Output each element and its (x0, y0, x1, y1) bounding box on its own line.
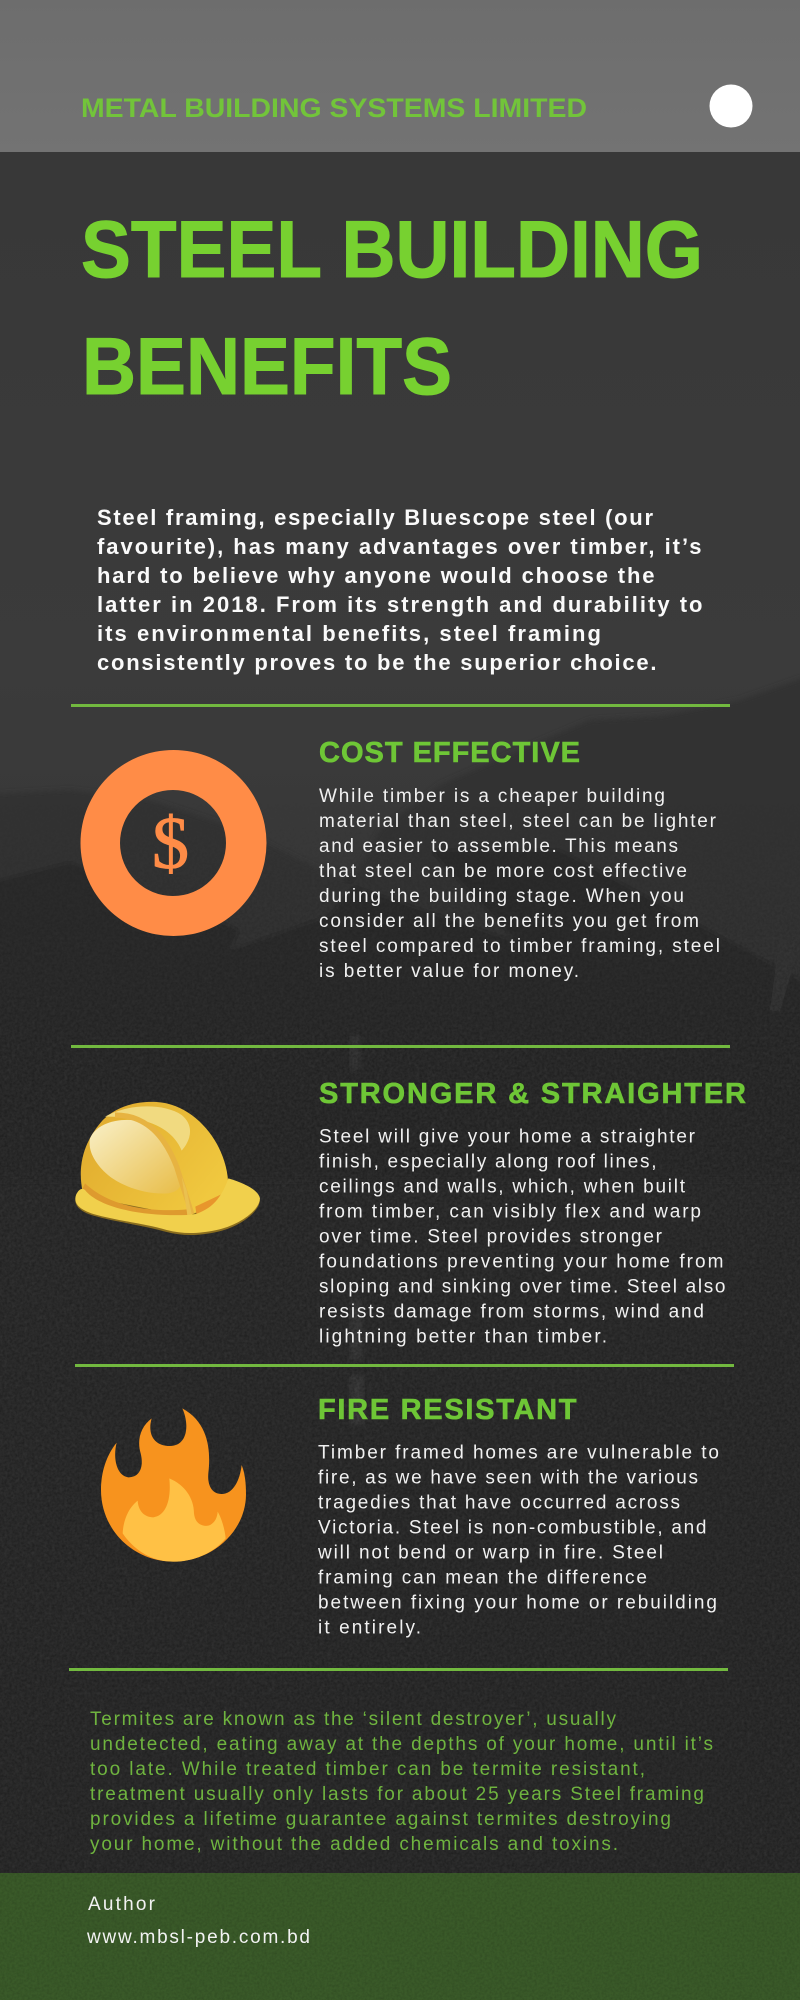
text block: stronger and straighter: lightning better than timber. (319, 1326, 607, 1348)
text block: cost effective: material than steel, steel can be lighter (319, 811, 717, 832)
panel: cost effective (80, 737, 720, 982)
text block: stronger and straighter: from timber, can visibly flex and warp (319, 1202, 701, 1222)
text block: stronger and straighter: Steel will give your home a straighter (319, 1126, 696, 1148)
panel: stronger and straighter (75, 1078, 746, 1348)
text block: cost effective: is better value for money. (319, 961, 579, 982)
intro paragraph: Steel framing, especially Bluescope steel (our (97, 505, 653, 530)
panel: fire resistant (101, 1394, 719, 1638)
intro paragraph: hard to believe why anyone would choose the (97, 563, 654, 588)
text block: fire resistant: fire, as we have seen with the various (318, 1468, 698, 1488)
text block: fire resistant: framing can mean the difference (318, 1568, 647, 1588)
intro paragraph: its environmental benefits, steel framing (97, 621, 601, 646)
text block: termites: Termites are known as the ‘silent destroyer’, usually (90, 1709, 616, 1730)
text block: cost effective: that steel can be more cost effective (319, 861, 687, 882)
title: STEEL BUILDING (81, 205, 703, 295)
text block: stronger and straighter: over time. Steel provides stronger (319, 1226, 663, 1248)
text block: fire resistant: tragedies that have occurred across (318, 1492, 680, 1514)
heading: stronger and straighter: STRONGER & STRAIGHTER (319, 1078, 746, 1110)
text block: cost effective: While timber is a cheaper building (319, 786, 665, 807)
text block: cost effective: steel compared to timber framing, steel (319, 936, 720, 957)
text block: stronger and straighter (319, 1126, 726, 1348)
text block: fire resistant: it entirely. (318, 1618, 421, 1638)
text block: fire resistant (317, 1442, 719, 1638)
website: www.mbsl-peb.com.bd (86, 1927, 310, 1948)
intro paragraph: consistently proves to be the superior choice. (97, 650, 656, 675)
text block: termites (90, 1709, 713, 1855)
text block: stronger and straighter: resists damage from storms, wind and (319, 1302, 704, 1322)
icon: orange ring with dollar sign: $ (152, 803, 189, 885)
text block: termites: treatment usually only lasts for about 25 years Steel framing (90, 1784, 704, 1805)
text block: stronger and straighter: sloping and sinking over time. Steel also (319, 1276, 726, 1298)
text block: stronger and straighter: foundations preventing your home from (319, 1252, 724, 1272)
text block: cost effective: during the building stage. When you (319, 886, 684, 907)
intro paragraph (97, 505, 703, 675)
text block: fire resistant: Timber framed homes are vulnerable to (318, 1442, 719, 1464)
text block: fire resistant: will not bend or warp in fire. Steel (317, 1542, 663, 1564)
text block: cost effective: and easier to assemble. This means (319, 836, 678, 857)
text block: cost effective: consider all the benefits you get from (319, 911, 699, 932)
author label: Author (88, 1894, 156, 1915)
text block: cost effective (319, 786, 720, 982)
icon: flame (101, 1408, 246, 1562)
intro paragraph: favourite), has many advantages over timber, it’s (97, 534, 702, 559)
text block: fire resistant: Victoria. Steel is non-combustible, and (318, 1518, 706, 1538)
text block: termites: too late. While treated timber can be termite resistant, (90, 1759, 645, 1780)
text block: termites: provides a lifetime guarantee against termites destroying (90, 1809, 671, 1830)
intro paragraph: latter in 2018. From its strength and durability to (97, 592, 703, 617)
text block: stronger and straighter: ceilings and walls, which, when built (319, 1176, 686, 1198)
footer band (0, 1873, 800, 2000)
title (81, 205, 703, 412)
logo placeholder: white circle (710, 84, 752, 128)
heading: fire resistant: FIRE RESISTANT (318, 1394, 577, 1426)
text block: fire resistant: between fixing your home or rebuilding (318, 1592, 717, 1614)
icon: yellow hard hat (75, 1102, 260, 1235)
text block: stronger and straighter: finish, especially along roof lines, (319, 1152, 656, 1172)
text block: termites: undetected, eating away at the depths of your home, until it’s (90, 1734, 713, 1755)
heading: cost effective: COST EFFECTIVE (319, 737, 580, 769)
icon: orange ring with dollar sign (80, 750, 266, 936)
text block: termites: your home, without the added chemicals and toxins. (90, 1834, 618, 1855)
header band (0, 0, 800, 152)
title: BENEFITS (82, 322, 452, 412)
company name: METAL BUILDING SYSTEMS LIMITED (81, 93, 587, 123)
